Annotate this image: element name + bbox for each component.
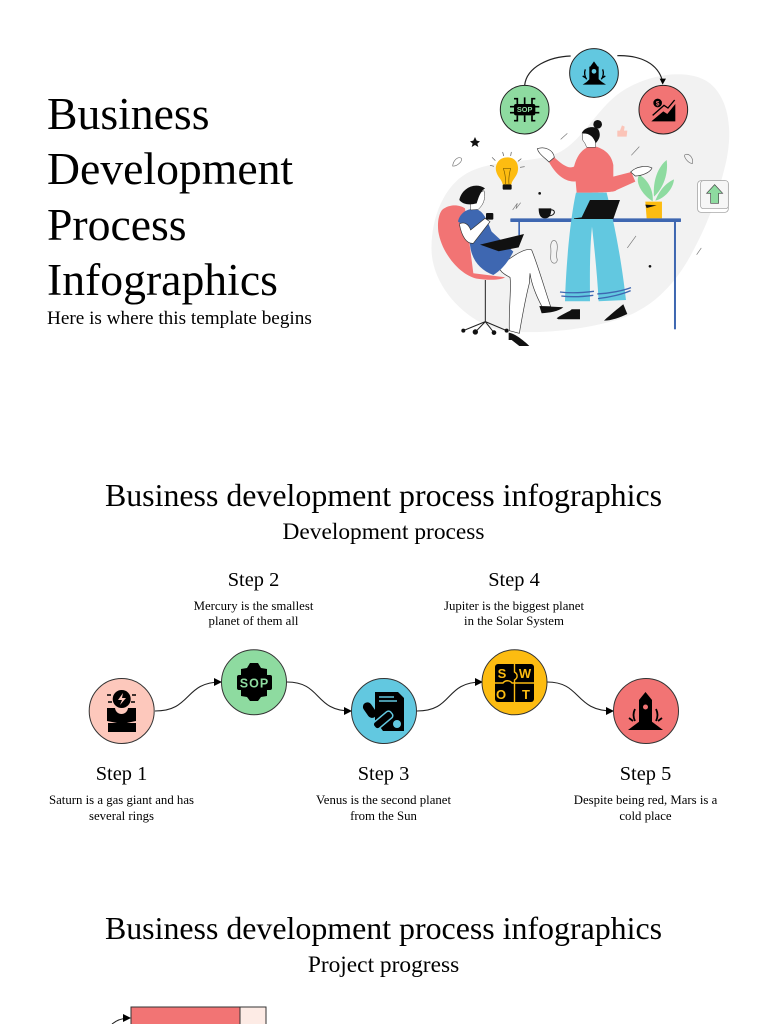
step 4 text: Step 4 bbox=[488, 569, 540, 591]
woman seated bbox=[458, 186, 563, 346]
arm bbox=[459, 218, 490, 243]
section heading: development: Business development process infographics bbox=[105, 478, 662, 513]
upload key icon bbox=[698, 181, 728, 212]
step 3 text: Venus is the second planet bbox=[316, 793, 451, 807]
step 1 text: Saturn is a gas giant and has bbox=[49, 793, 194, 807]
step 1 text bbox=[49, 763, 194, 823]
decorative marks bbox=[453, 133, 701, 263]
section heading: project progress: Business development process infographics bbox=[105, 911, 662, 946]
illustration: business team bbox=[432, 49, 729, 346]
step 4 icon: S bbox=[498, 666, 507, 681]
subtitle: Here is where this template begins bbox=[47, 308, 312, 329]
plant bbox=[638, 160, 674, 218]
step 5 text: Step 5 bbox=[620, 763, 671, 785]
connector: step 4 to 5 bbox=[547, 682, 613, 711]
circle icon: money growth: $ bbox=[656, 100, 660, 107]
shoes bbox=[557, 309, 580, 319]
step 4 icon: W bbox=[519, 666, 532, 681]
connector: step 3 to 4 bbox=[417, 682, 482, 711]
step 1 text: Step 1 bbox=[96, 763, 147, 785]
step 1 icon bbox=[89, 678, 154, 744]
background blob bbox=[432, 74, 729, 332]
laptop bbox=[480, 234, 524, 251]
circle icon: rocket bbox=[570, 49, 618, 97]
step 1 text: several rings bbox=[89, 809, 154, 823]
title: Development bbox=[47, 143, 293, 194]
trousers bbox=[565, 193, 626, 301]
step 4 icon: O bbox=[496, 687, 506, 702]
section heading: project progress: Project progress bbox=[308, 952, 459, 978]
step 3 text: Step 3 bbox=[358, 763, 409, 785]
step 2 text: planet of them all bbox=[209, 614, 299, 628]
progress arrow bbox=[112, 1018, 130, 1024]
step 2 text: Step 2 bbox=[228, 569, 279, 591]
circle icon: SOP chip: SOP bbox=[517, 105, 533, 114]
process timeline bbox=[49, 569, 718, 823]
phone bbox=[486, 213, 493, 220]
step 3 text: from the Sun bbox=[350, 809, 418, 823]
section heading: development: Development process bbox=[282, 519, 485, 545]
connector: step 2 to 3 bbox=[287, 682, 351, 711]
step 4 icon: T bbox=[522, 687, 530, 702]
title: Infographics bbox=[47, 254, 278, 305]
head bbox=[471, 191, 485, 210]
woman standing bbox=[537, 120, 652, 321]
connector: step 1 to 2 bbox=[155, 682, 221, 711]
title: Business bbox=[47, 88, 209, 139]
circle icon: money growth bbox=[639, 85, 688, 134]
step 2 text: Mercury is the smallest bbox=[194, 599, 314, 613]
coffee cup bbox=[539, 208, 554, 218]
section heading: development bbox=[105, 478, 662, 545]
title bbox=[47, 88, 293, 305]
connector arcs bbox=[525, 56, 663, 85]
star bbox=[470, 137, 480, 147]
head bbox=[583, 133, 596, 147]
step 5 icon bbox=[614, 678, 678, 744]
step 4 text bbox=[444, 569, 584, 628]
step 5 text: Despite being red, Mars is a bbox=[574, 793, 718, 807]
progress bar bbox=[112, 1007, 266, 1024]
laptop on desk bbox=[574, 200, 620, 219]
light bulb bbox=[490, 152, 525, 190]
step 5 text: cold place bbox=[619, 809, 672, 823]
step 4 text: Jupiter is the biggest planet bbox=[444, 599, 584, 613]
step 5 text bbox=[574, 763, 718, 823]
legs bbox=[498, 249, 551, 333]
step 2 icon bbox=[222, 650, 286, 715]
step 4 text: in the Solar System bbox=[464, 614, 564, 628]
step 2 text bbox=[194, 569, 314, 628]
section heading: project progress bbox=[105, 911, 662, 978]
dress bbox=[458, 209, 513, 275]
hands bbox=[537, 148, 554, 162]
step 2 icon: SOP bbox=[240, 676, 269, 690]
chair bbox=[438, 205, 509, 335]
step 3 icon bbox=[352, 678, 416, 744]
shoes bbox=[539, 306, 563, 313]
desk bbox=[510, 218, 681, 329]
step 4 icon bbox=[482, 650, 547, 715]
sweater bbox=[549, 147, 635, 193]
title: Process bbox=[47, 199, 187, 250]
circle icon: SOP chip bbox=[500, 85, 549, 134]
step 3 text bbox=[316, 763, 451, 823]
thumbs up bbox=[617, 125, 627, 137]
